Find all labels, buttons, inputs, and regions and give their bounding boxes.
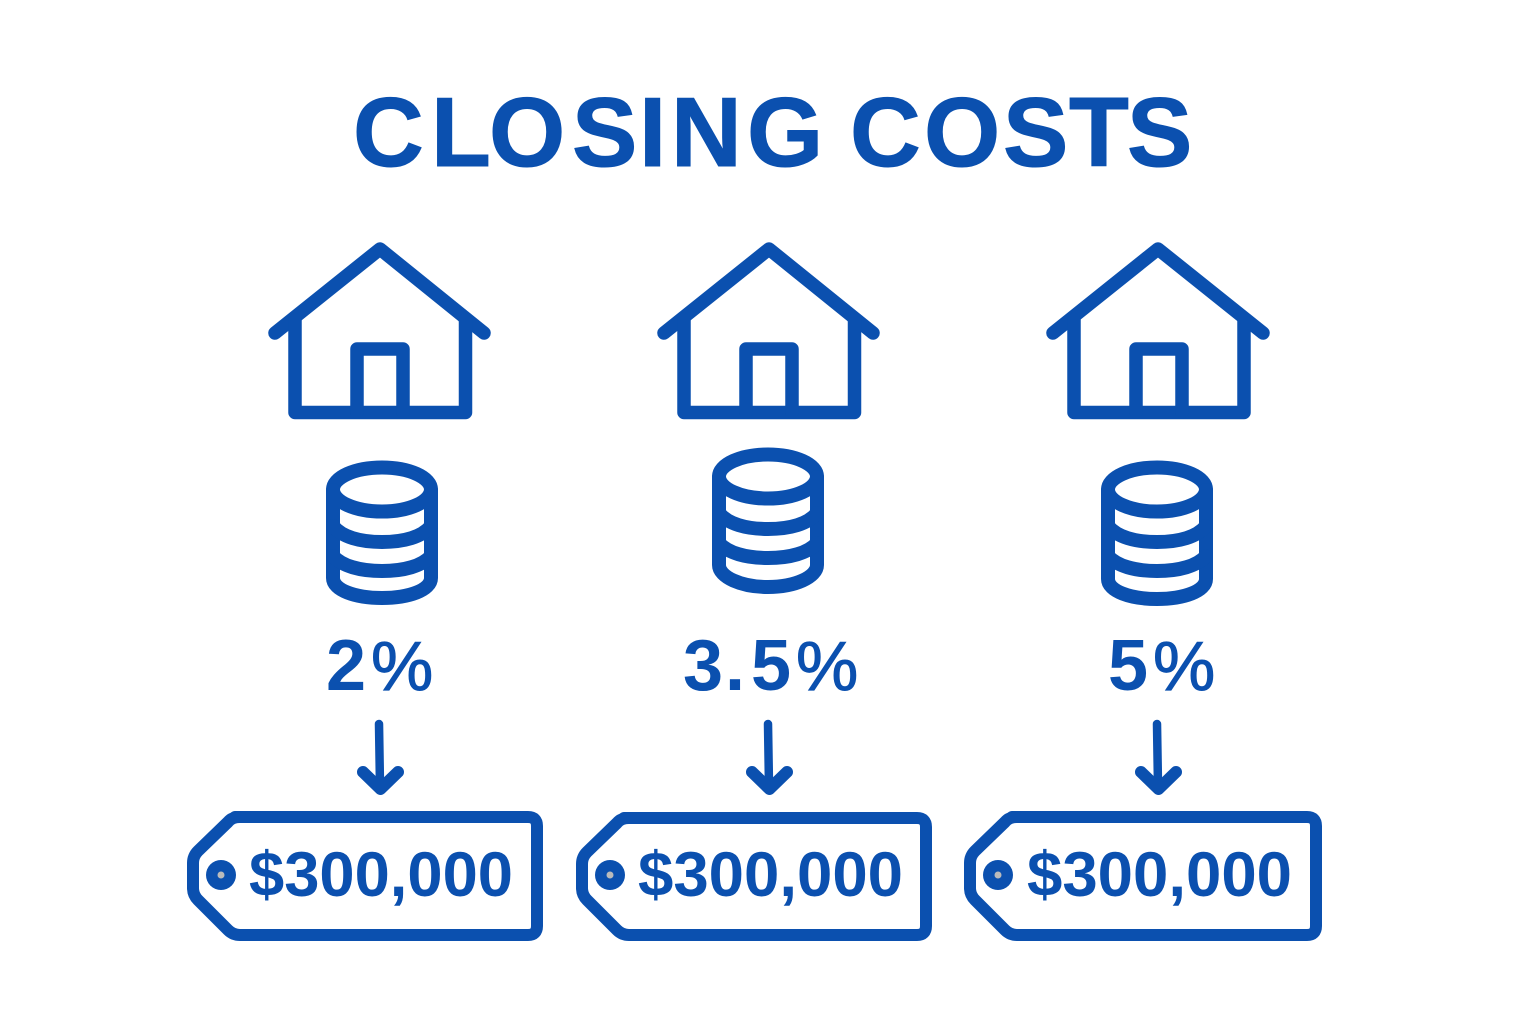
percentage: % (371, 627, 433, 705)
title: CLOSING COSTS (353, 77, 1192, 187)
icon: coin stack (1108, 468, 1206, 599)
arrow (363, 724, 398, 789)
price tag: $300,000 (638, 840, 903, 910)
percentage: 2 (326, 626, 366, 706)
price tag: $300,000 (249, 840, 513, 910)
price tag (970, 817, 1316, 935)
icon: coin stack (333, 468, 431, 598)
price tag (582, 818, 926, 935)
percentage: . (725, 626, 745, 706)
percentage: 5 (751, 626, 791, 706)
arrow (752, 724, 787, 789)
percentage: % (796, 627, 858, 705)
percentage: 3 (683, 626, 723, 706)
icon: coin stack (719, 454, 817, 587)
icon: house (1053, 249, 1263, 412)
price tag (193, 817, 537, 935)
percentage: 5 (1108, 626, 1148, 706)
column: 5% (970, 249, 1316, 935)
percentage: % (1153, 627, 1215, 705)
column: 3.5% (582, 249, 926, 935)
icon: house (664, 249, 873, 412)
column: 2% (193, 249, 537, 935)
arrow (1141, 724, 1176, 789)
price tag: $300,000 (1027, 840, 1292, 910)
icon: house (275, 249, 484, 412)
